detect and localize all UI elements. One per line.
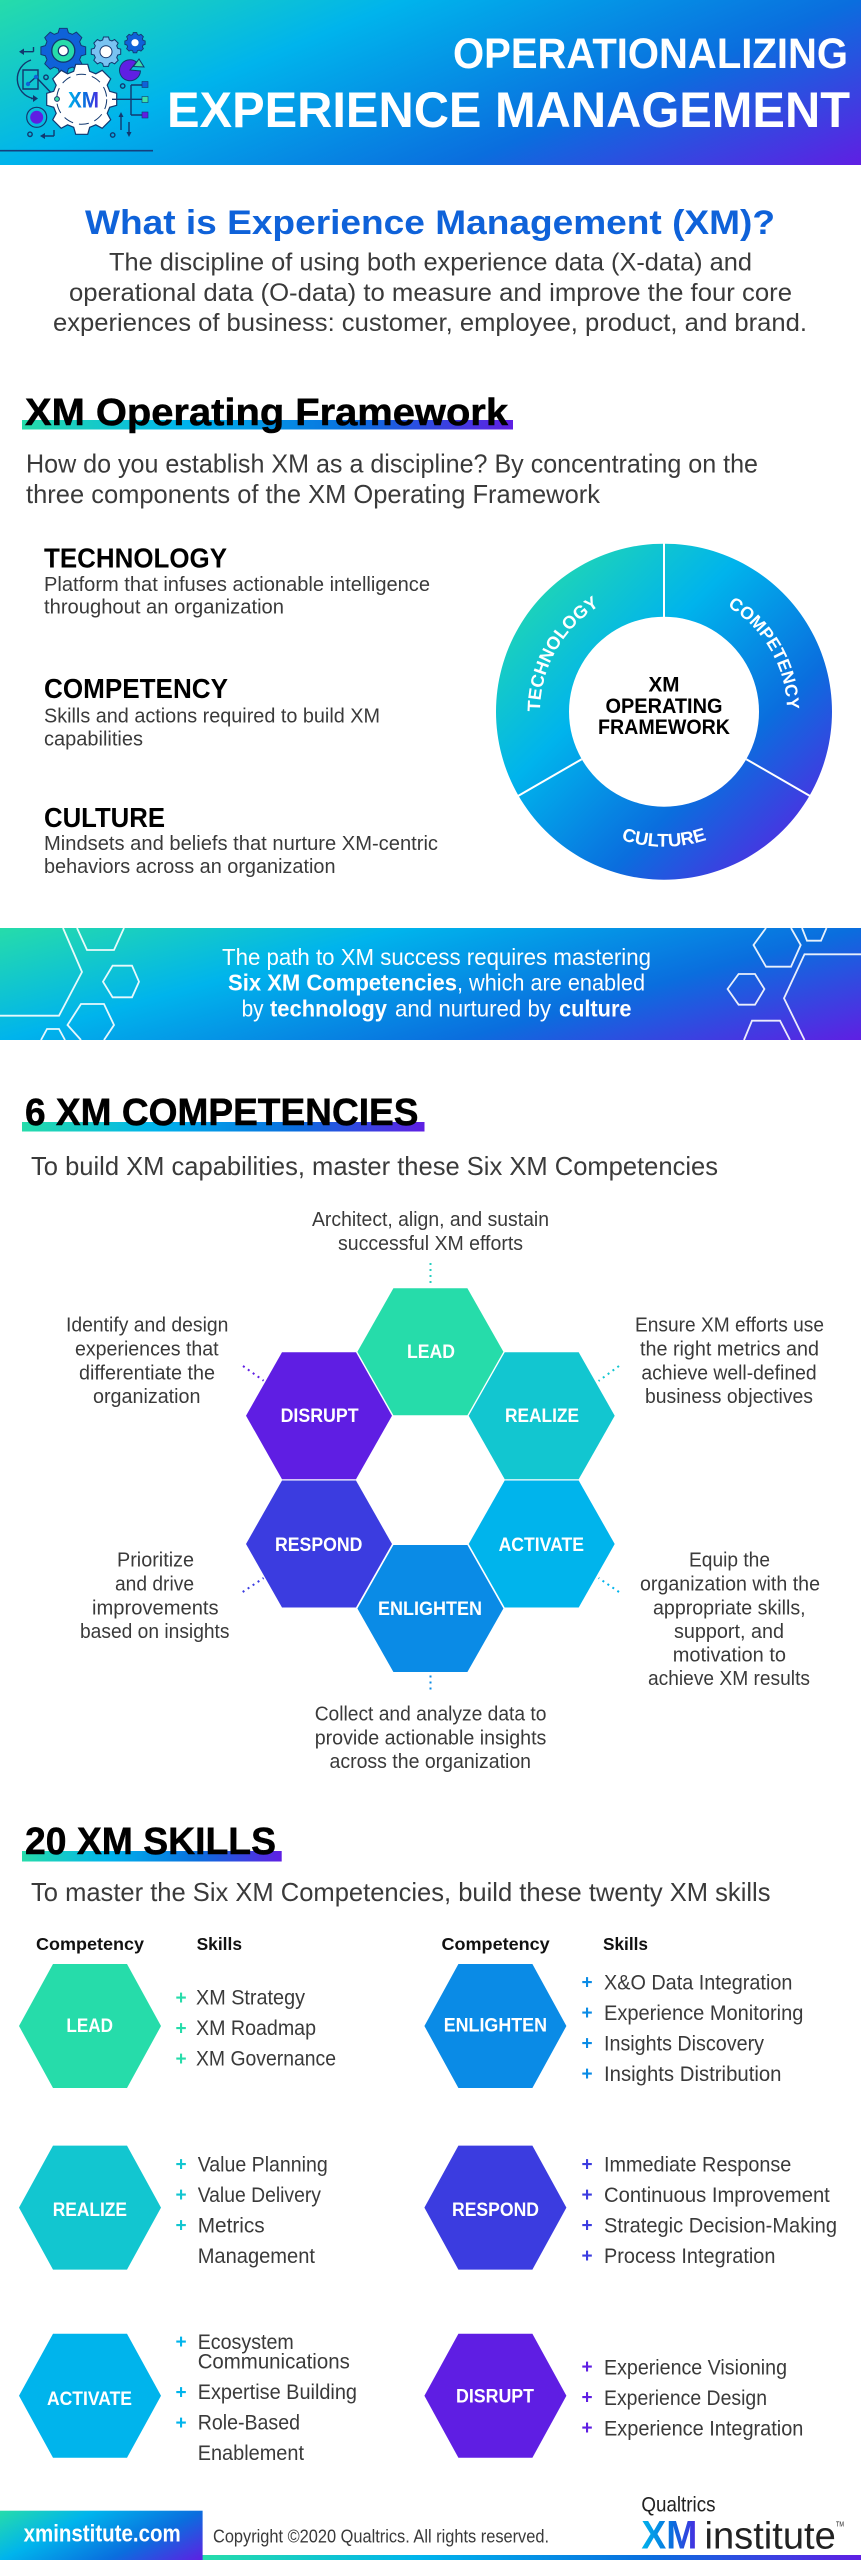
- row: ACTIVATE skills: ACTIVATE: [47, 2389, 132, 2410]
- description: respond: improvements: [92, 1597, 219, 1619]
- callout text: and nurtured by: [395, 996, 551, 1022]
- row: DISRUPT skills: +: [581, 2418, 593, 2439]
- technology block: Platform that infuses actionable intelligence: [44, 574, 430, 596]
- row: ENLIGHTEN skills: Insights Discovery: [604, 2033, 764, 2056]
- logo: Qualtrics XM institute: TM: [836, 2522, 844, 2528]
- row: RESPOND skills: +: [581, 2154, 593, 2176]
- ring label: technology: TECHNOLOGY: [528, 596, 596, 712]
- row: REALIZE skills: +: [175, 2216, 187, 2236]
- row: RESPOND skills: [424, 2146, 837, 2270]
- row: ACTIVATE skills: Enablement: [198, 2442, 304, 2465]
- skills intro: To master the Six XM Competencies, build these twenty XM skills: [31, 1877, 770, 1907]
- description: disrupt: differentiate the: [79, 1362, 215, 1384]
- column headers: Skills: [603, 1934, 648, 1954]
- callout text: Six XM Competencies: [228, 970, 457, 996]
- callout text: The path to XM success requires mastering: [222, 944, 651, 970]
- definition text: experiences of business: customer, employee, product, and brand.: [53, 309, 807, 337]
- description: disrupt: organization: [93, 1386, 200, 1408]
- website tag: [0, 2511, 203, 2560]
- description: activate: Equip the: [689, 1550, 770, 1572]
- website tag: xminstitute.com: [24, 2521, 181, 2548]
- callout text: , which are enabled: [457, 970, 645, 996]
- logo: Qualtrics XM institute: institute: [704, 2515, 836, 2557]
- description: disrupt: Identify and design: [66, 1315, 228, 1337]
- row: ACTIVATE skills: Ecosystem: [198, 2331, 294, 2354]
- description: lead: Architect, align, and sustain: [312, 1209, 549, 1231]
- row: LEAD skills: +: [175, 2018, 187, 2039]
- technology block: throughout an organization: [44, 596, 284, 618]
- footer bar: [202, 2555, 861, 2560]
- description: disrupt: [66, 1315, 264, 1408]
- description: realize: the right metrics and: [640, 1338, 819, 1360]
- row: DISRUPT skills: +: [581, 2357, 593, 2378]
- row: REALIZE skills: Management: [198, 2245, 315, 2268]
- description: respond: Prioritize: [117, 1550, 194, 1572]
- row: LEAD skills: LEAD: [66, 2016, 113, 2037]
- ring chart: framework: [496, 544, 832, 880]
- row: ENLIGHTEN skills: Experience Monitoring: [604, 2002, 803, 2025]
- logo: Qualtrics XM institute: [641, 2494, 844, 2557]
- row: LEAD skills: XM Strategy: [196, 1987, 305, 2010]
- row: REALIZE skills: +: [175, 2185, 187, 2206]
- description: activate: [599, 1550, 820, 1690]
- hexagon: ENLIGHTEN: [357, 1545, 503, 1672]
- row: RESPOND skills: +: [581, 2216, 593, 2236]
- section: XM operating framework: [22, 392, 832, 880]
- row: DISRUPT skills: Experience Visioning: [604, 2356, 787, 2379]
- definition text: operational data (O-data) to measure and improve the four core: [69, 279, 792, 307]
- description: realize: [599, 1315, 824, 1408]
- footer: [0, 2494, 861, 2560]
- column headers: [36, 1934, 648, 1954]
- row: REALIZE skills: +: [175, 2154, 187, 2176]
- row: ACTIVATE skills: +: [175, 2332, 187, 2353]
- hexagon: ACTIVATE: [469, 1480, 615, 1608]
- description: realize: Ensure XM efforts use: [635, 1315, 824, 1337]
- heading: what is XM: What is Experience Management (XM)?: [85, 204, 775, 242]
- row: DISRUPT skills: Experience Design: [604, 2387, 767, 2410]
- hexagon: DISRUPT: [246, 1352, 392, 1479]
- hexagon: ACTIVATE: ACTIVATE: [499, 1535, 584, 1556]
- callout text: [222, 944, 651, 1022]
- framework intro text: [26, 448, 758, 509]
- section: 20 XM skills: [19, 1821, 837, 2465]
- culture block: CULTURE: [44, 802, 165, 833]
- row: ENLIGHTEN skills: Insights Distribution: [604, 2063, 782, 2086]
- description: enlighten: across the organization: [330, 1751, 531, 1773]
- technology block: TECHNOLOGY: [44, 542, 227, 574]
- hexagon: REALIZE: [469, 1352, 615, 1479]
- row: REALIZE skills: [19, 2146, 328, 2270]
- description: enlighten: provide actionable insights: [315, 1727, 546, 1749]
- hexagon: RESPOND: RESPOND: [275, 1535, 362, 1556]
- row: LEAD skills: XM Roadmap: [196, 2017, 316, 2040]
- row: REALIZE skills: REALIZE: [53, 2200, 127, 2221]
- copyright: Copyright ©2020 Qualtrics. All rights reserved.: [213, 2526, 549, 2546]
- row: LEAD skills: +: [175, 2049, 187, 2070]
- hexagon: RESPOND: [246, 1480, 392, 1608]
- heading: 20 XM Skills: 20 XM SKILLS: [25, 1821, 276, 1863]
- row: RESPOND skills: Strategic Decision-Making: [604, 2214, 837, 2237]
- ring label: culture: CULTURE: [623, 828, 706, 847]
- row: ENLIGHTEN skills: +: [581, 2003, 593, 2024]
- heading: XM Operating Framework: XM Operating Framework: [25, 392, 509, 434]
- competency block: COMPETENCY: [44, 673, 228, 704]
- icon: XM gears illustration: [0, 28, 153, 151]
- definition text: [53, 248, 807, 337]
- ring label: competency: COMPETENCY: [730, 598, 800, 708]
- description: realize: business objectives: [645, 1386, 813, 1408]
- row: ENLIGHTEN skills: +: [581, 2033, 593, 2054]
- column headers: Competency: [36, 1934, 144, 1954]
- row: RESPOND skills: +: [581, 2185, 593, 2206]
- description: lead: [312, 1209, 549, 1287]
- ring centre label: XM: [648, 674, 680, 697]
- row: REALIZE skills: Value Planning: [198, 2153, 328, 2176]
- competency block: Skills and actions required to build XM: [44, 706, 380, 728]
- hexagon: LEAD: LEAD: [407, 1342, 455, 1363]
- culture block: behaviors across an organization: [44, 856, 336, 878]
- description: activate: motivation to: [673, 1645, 786, 1667]
- hexagon: LEAD: [357, 1288, 503, 1415]
- description: activate: organization with the: [640, 1574, 820, 1596]
- row: ACTIVATE skills: +: [175, 2382, 187, 2403]
- heading: 6 XM Competencies: 6 XM COMPETENCIES: [25, 1092, 418, 1134]
- description: activate: appropriate skills,: [653, 1597, 806, 1619]
- framework intro text: three components of the XM Operating Framework: [26, 479, 601, 509]
- row: RESPOND skills: Process Integration: [604, 2245, 775, 2268]
- callout text: technology: [270, 996, 387, 1022]
- description: respond: based on insights: [80, 1621, 230, 1643]
- description: lead: successful XM efforts: [338, 1233, 523, 1255]
- row: ENLIGHTEN skills: ENLIGHTEN: [444, 2016, 547, 2037]
- definition text: The discipline of using both experience data (X-data) and: [109, 248, 752, 276]
- row: ENLIGHTEN skills: X&O Data Integration: [604, 1972, 792, 1994]
- title line 2: EXPERIENCE MANAGEMENT: [167, 82, 850, 138]
- row: ENLIGHTEN skills: +: [581, 1972, 593, 1993]
- section: 6 XM competencies: [22, 1092, 824, 1773]
- row: ACTIVATE skills: +: [175, 2413, 187, 2434]
- row: ACTIVATE skills: [19, 2331, 357, 2465]
- description: enlighten: [315, 1676, 546, 1773]
- row: ENLIGHTEN skills: [424, 1964, 803, 2088]
- callout banner: path to XM success: [0, 928, 861, 1040]
- competency block: capabilities: [44, 728, 143, 750]
- row: REALIZE skills: Metrics: [198, 2214, 265, 2237]
- callout text: by: [242, 996, 264, 1022]
- culture block: Mindsets and beliefs that nurture XM-centric: [44, 833, 438, 855]
- description: respond: and drive: [115, 1574, 194, 1596]
- competencies intro: To build XM capabilities, master these Six XM Competencies: [31, 1151, 718, 1181]
- row: RESPOND skills: RESPOND: [452, 2200, 539, 2221]
- row: RESPOND skills: Immediate Response: [604, 2153, 791, 2176]
- row: ACTIVATE skills: Expertise Building: [198, 2381, 357, 2404]
- framework intro text: How do you establish XM as a discipline? By concentrating on the: [26, 448, 758, 478]
- row: DISRUPT skills: DISRUPT: [456, 2386, 534, 2408]
- row: LEAD skills: XM Governance: [196, 2048, 336, 2071]
- description: activate: support, and: [674, 1621, 784, 1643]
- row: ENLIGHTEN skills: +: [581, 2064, 593, 2085]
- row: ACTIVATE skills: Role-Based: [198, 2412, 300, 2435]
- ring centre label: OPERATING: [606, 695, 722, 718]
- callout text: culture: [559, 996, 632, 1022]
- logo: Qualtrics XM institute: Qualtrics: [641, 2494, 716, 2517]
- logo: Qualtrics XM institute: XM: [641, 2513, 697, 2557]
- row: DISRUPT skills: Experience Integration: [604, 2418, 803, 2440]
- hexagon: ENLIGHTEN: ENLIGHTEN: [378, 1599, 482, 1620]
- competency block: [44, 673, 380, 750]
- row: DISRUPT skills: +: [581, 2388, 593, 2408]
- hexagon: REALIZE: REALIZE: [505, 1406, 579, 1427]
- hexagon: DISRUPT: DISRUPT: [281, 1406, 359, 1427]
- description: activate: achieve XM results: [648, 1668, 810, 1690]
- description: realize: achieve well-defined: [641, 1362, 817, 1384]
- description: enlighten: Collect and analyze data to: [315, 1704, 546, 1726]
- column headers: Skills: [197, 1934, 242, 1954]
- section: what is XM: [53, 204, 807, 337]
- culture block: [44, 802, 438, 878]
- row: LEAD skills: [19, 1964, 336, 2088]
- row: RESPOND skills: Continuous Improvement: [604, 2184, 830, 2207]
- header banner: [0, 0, 861, 165]
- row: RESPOND skills: +: [581, 2246, 593, 2267]
- row: LEAD skills: +: [175, 1988, 187, 2009]
- row: ACTIVATE skills: Communications: [198, 2351, 350, 2374]
- description: disrupt: experiences that: [75, 1338, 219, 1360]
- description: respond: [80, 1550, 264, 1643]
- ring centre label: [598, 674, 730, 739]
- column headers: Competency: [442, 1934, 550, 1954]
- ring centre label: FRAMEWORK: [598, 716, 730, 739]
- XM logo text: XM: [68, 88, 99, 112]
- row: DISRUPT skills: [424, 2334, 803, 2458]
- technology block: [44, 542, 430, 618]
- row: REALIZE skills: Value Delivery: [198, 2184, 321, 2207]
